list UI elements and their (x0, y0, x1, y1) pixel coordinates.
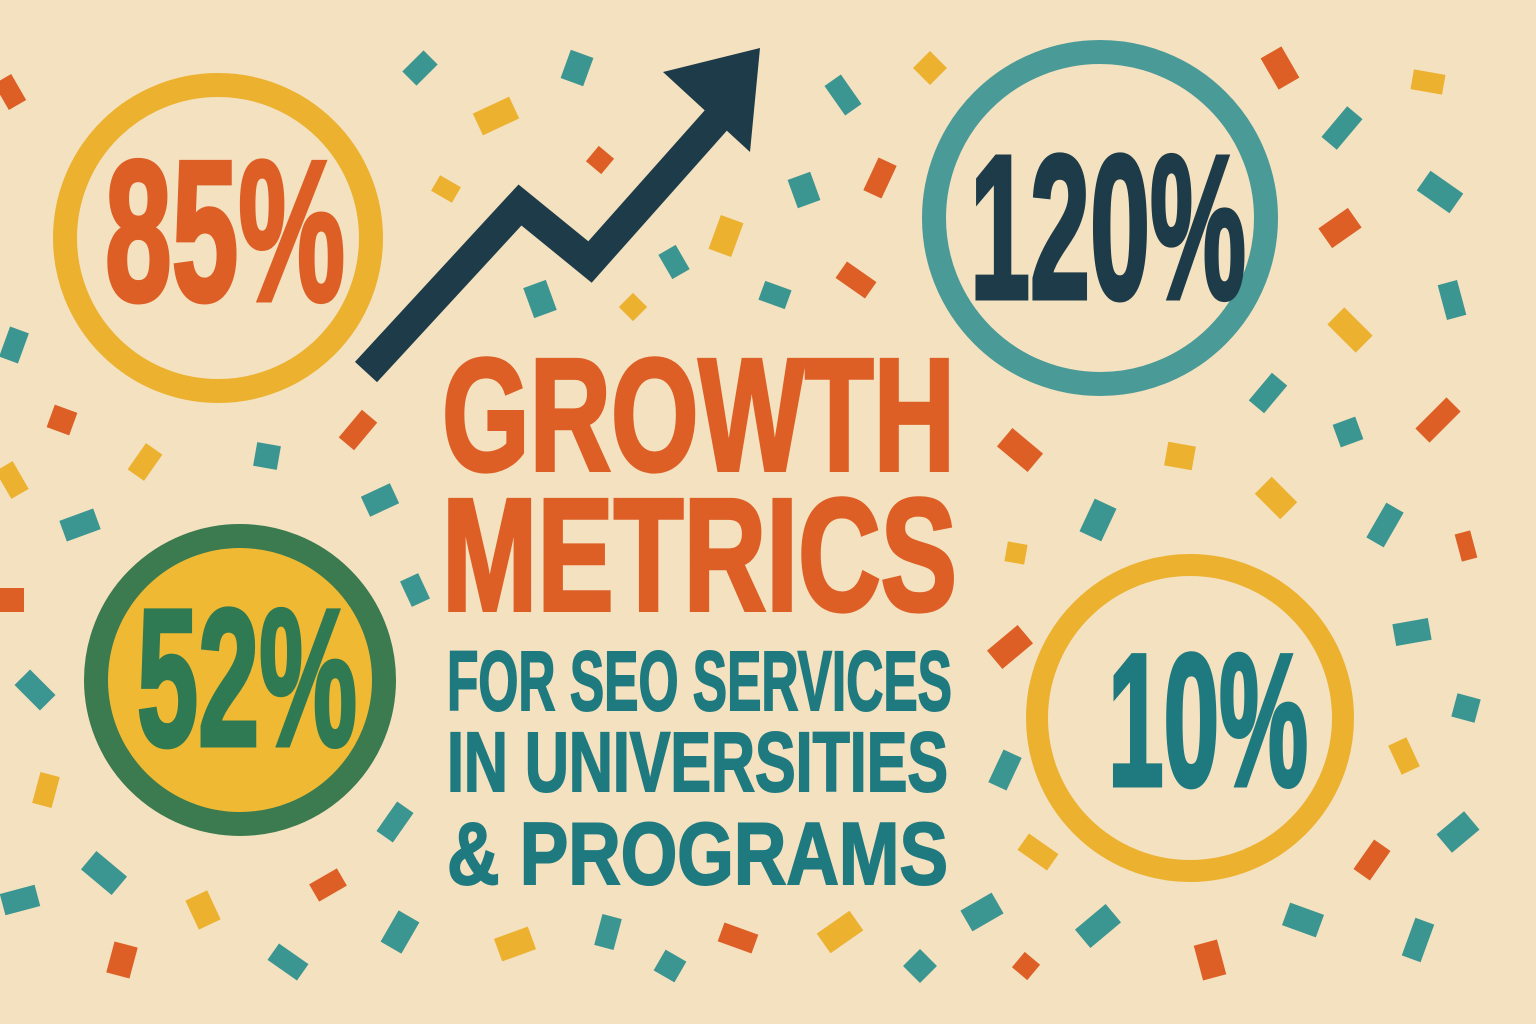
stat circle: 120%: 120% (970, 113, 1246, 342)
subtitle: & PROGRAMS (447, 804, 948, 903)
stat circle: 85% (65, 85, 371, 391)
title: GROWTH (442, 325, 955, 504)
subtitle (447, 634, 952, 903)
stat circle: 120% (934, 52, 1266, 384)
stat circle: 52%: 52% (137, 569, 357, 787)
stat circle: 52% (96, 536, 384, 824)
arrow: growth trend (366, 48, 760, 372)
title: METRICS (442, 465, 957, 644)
subtitle: FOR SEO SERVICES (447, 634, 952, 728)
title (442, 325, 957, 644)
stat circle: 85%: 85% (105, 120, 345, 343)
stat circle: 10%: 10% (1108, 615, 1308, 825)
stat circle: 10% (1037, 565, 1343, 871)
subtitle: IN UNIVERSITIES (447, 715, 948, 809)
